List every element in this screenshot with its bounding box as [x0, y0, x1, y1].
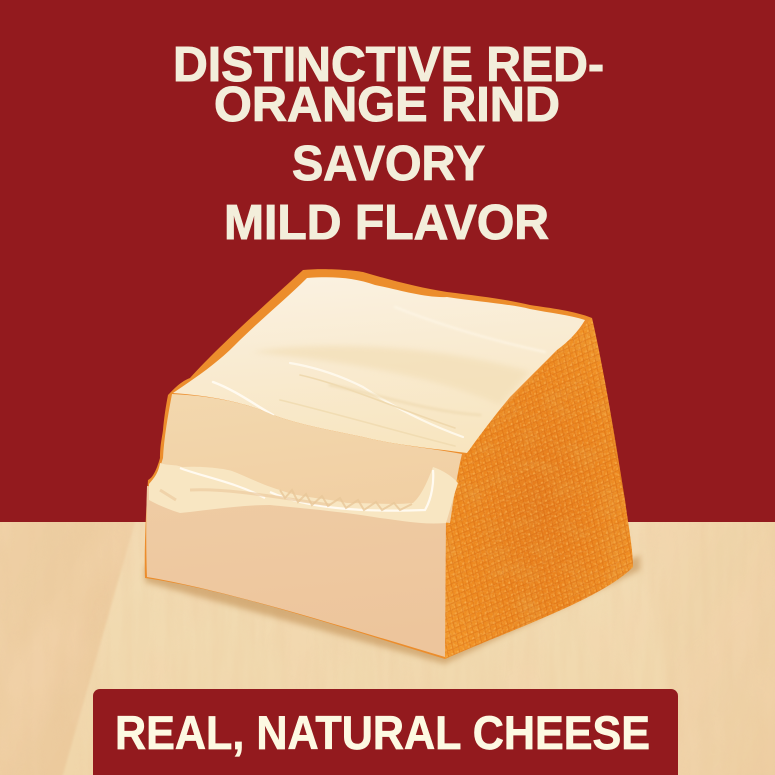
cheese upper cut face	[150, 394, 462, 523]
wooden board	[0, 515, 775, 775]
heading: savory: SAVORY	[292, 137, 485, 191]
cheese shadow on board	[145, 555, 640, 664]
cheese top creases	[213, 307, 545, 446]
cheese lower cut face	[146, 486, 446, 657]
heading line one: DISTINCTIVE RED-	[173, 38, 604, 92]
cheese torn ridge	[149, 463, 458, 523]
cheese top surface	[173, 277, 585, 453]
banner text: REAL, NATURAL CHEESE	[115, 706, 650, 759]
cheese silhouette rim	[145, 269, 592, 659]
banner: real, natural cheese	[93, 689, 678, 775]
heading: mild flavor: MILD FLAVOR	[224, 196, 549, 250]
heading line two: ORANGE RIND	[214, 78, 560, 132]
heading: distinctive red-orange rind	[173, 38, 604, 132]
cheese rind side	[440, 310, 640, 665]
banner background	[93, 689, 678, 775]
cheese wedge	[145, 269, 640, 665]
